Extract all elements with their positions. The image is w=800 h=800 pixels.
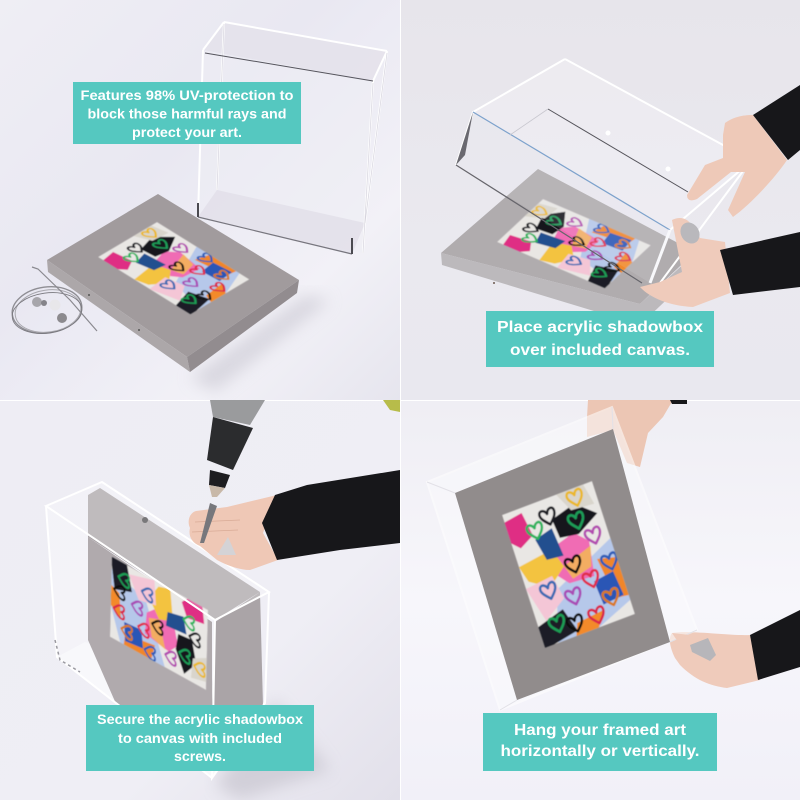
panel 3 background <box>0 401 400 800</box>
acrylic box held above canvas <box>456 59 749 283</box>
top hand <box>587 400 687 467</box>
label: step 2: Place acrylic shadowbox <box>497 319 703 336</box>
acrylic box back <box>46 506 265 778</box>
label: step 4 <box>483 713 717 771</box>
artwork: painted hearts <box>497 199 651 288</box>
acrylic frame <box>427 407 697 710</box>
label: step 3: Secure the acrylic shadowbox <box>97 711 303 727</box>
upper hand holding box <box>687 85 800 217</box>
label: step 2: over included canvas. <box>510 342 690 359</box>
drill battery tip <box>383 400 400 412</box>
label: step 1: protect your art. <box>132 124 242 140</box>
acrylic box edges <box>46 482 269 778</box>
panel 4 background <box>401 401 800 800</box>
panel: step 2 place shadowbox <box>401 0 800 400</box>
canvas shadow <box>190 295 330 392</box>
artwork: painted hearts <box>502 481 635 648</box>
label: step 1: block those harmful rays and <box>88 106 286 122</box>
linen canvas <box>441 169 700 325</box>
panel: step 3 secure with screws <box>0 400 400 800</box>
linen canvas <box>47 194 299 372</box>
hand with ring <box>189 470 400 570</box>
label: step 4: horizontally or vertically. <box>500 743 700 760</box>
panel: step 4 hang art <box>401 400 800 800</box>
bottom hand and sleeve <box>670 610 800 688</box>
label: step 4: Hang your framed art <box>514 722 687 739</box>
thumb and ring <box>672 633 716 661</box>
artwork: painted hearts <box>110 557 208 690</box>
lower hand and sleeve <box>640 218 800 307</box>
label: step 2 <box>486 311 714 367</box>
linen canvas <box>455 429 670 700</box>
label: step 3: to canvas with included <box>118 730 282 746</box>
acrylic box empty <box>198 22 387 254</box>
power drill <box>207 400 265 497</box>
panel 1 background <box>0 0 400 400</box>
panel: step 1 components <box>0 0 400 400</box>
box floor shadow <box>215 700 330 800</box>
label: step 1: Features 98% UV-protection to <box>80 87 294 103</box>
label: step 3: screws. <box>174 748 226 764</box>
linen canvas <box>88 488 263 706</box>
artwork: painted hearts <box>98 222 249 314</box>
hanging wire and hardware <box>9 267 97 338</box>
panel 2 background <box>401 0 800 400</box>
label: step 3 <box>86 705 314 771</box>
label: step 1 <box>73 82 301 144</box>
